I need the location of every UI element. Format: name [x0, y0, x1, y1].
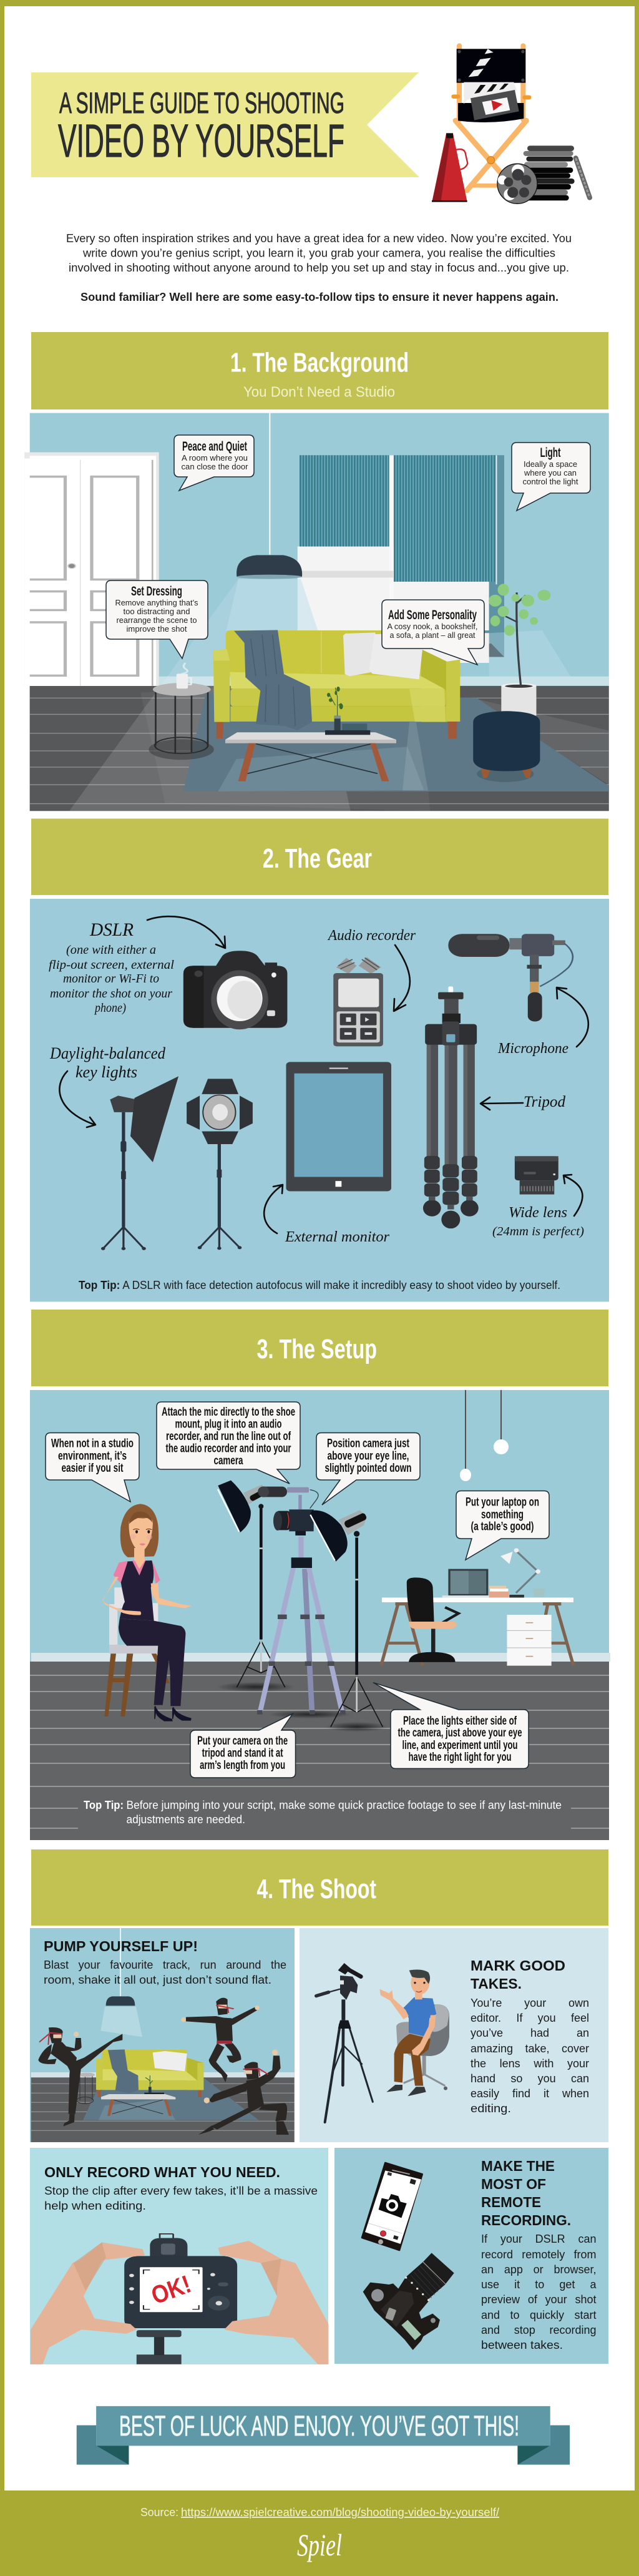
justified text: mark good takes: editor. If you feel	[471, 2012, 589, 2024]
illustration: desk with laptop and chair	[381, 1548, 573, 1666]
panel: pump yourself up: PUMP YOURSELF UP!	[44, 1938, 198, 1954]
gear label: DSLR: phone)	[94, 1001, 126, 1015]
illustration: phone and DSLR	[362, 2163, 454, 2350]
callout: Set Dressing: too distracting and	[124, 607, 190, 616]
justified text: mark good takes	[471, 1997, 589, 2100]
intro text: Sound familiar? Well here are some easy-to-follow tips to ensure it never happens again.	[80, 291, 559, 303]
justified text: mark good takes: amazing take, cover	[471, 2042, 589, 2055]
callout: place the lights: Place the lights either side of	[403, 1715, 517, 1728]
title banner: VIDEO BY YOURSELF	[58, 115, 344, 167]
arrow: audio recorder	[394, 945, 410, 1011]
gear label: DSLR	[49, 919, 174, 1015]
callout: sit	[46, 1433, 139, 1502]
panel: only record what you need: help when editing.	[44, 2200, 146, 2212]
arrow: DSLR	[147, 916, 225, 948]
arrow: microphone	[557, 987, 588, 1047]
arrow: key lights	[59, 1071, 95, 1127]
callout: Set Dressing: Remove anything that’s	[115, 598, 198, 607]
callout: attach the mic: Attach the mic directly to the shoe	[162, 1406, 295, 1419]
gear label: Daylight-balanced key lights	[49, 1044, 166, 1081]
footer: Source:	[140, 2506, 178, 2519]
callout: sit: environment, it’s	[58, 1449, 127, 1463]
intro text: write down you’re genius script, you learn it, you grab your camera, you realise the difficulties	[82, 247, 555, 260]
justified text: pump yourself up: Blast your favourite track, run around the	[44, 1959, 286, 1971]
callout: position camera	[316, 1433, 420, 1505]
panel: make the most of remote recording: REMOTE	[481, 2194, 541, 2210]
panel: living room scene	[24, 413, 609, 811]
callout: Add Some Personality	[382, 600, 484, 665]
gear label: DSLR: DSLR	[89, 919, 134, 940]
illustration: presenter, lights and camera on tripod	[102, 1481, 388, 1732]
heading: 2. The Gear: 2. The Gear	[263, 843, 372, 874]
icon: director chair, clapperboard, megaphone and film reels	[432, 46, 590, 203]
justified text: remote recording: and stop recording	[481, 2324, 597, 2336]
gear label: Wide lens	[492, 1205, 584, 1238]
panel: mark good takes: editing.	[471, 2102, 511, 2115]
gear label: Wide lens: Wide lens	[509, 1205, 567, 1221]
icon: audio recorder	[333, 957, 383, 1046]
panel: only record what you need	[30, 2148, 328, 2364]
gear label: Audio recorder: Audio recorder	[327, 928, 416, 944]
intro text: involved in shooting without anyone around to help you set up and stay in focus and...you give up.	[69, 262, 569, 274]
ribbon banner	[77, 2406, 570, 2465]
justified text: remote recording: an app or browser,	[481, 2263, 597, 2276]
arrow: tripod	[480, 1097, 523, 1110]
justified text: remote recording: and to quickly start	[481, 2309, 597, 2321]
callout: sit: easier if you sit	[61, 1462, 124, 1475]
arrow: external monitor	[264, 1185, 283, 1233]
right light	[310, 1510, 383, 1727]
callout: attach the mic: recorder, and run the line out of	[166, 1430, 291, 1443]
icon: external monitor tablet	[286, 1062, 391, 1191]
ninja jumping	[186, 1998, 258, 2082]
footer	[0, 2490, 639, 2576]
panel: make the most of remote recording	[334, 2148, 608, 2364]
callout: Peace and Quiet: A room where you	[182, 453, 248, 463]
callout: Light: where you can	[524, 468, 577, 477]
icon: DSLR camera	[183, 951, 287, 1029]
justified text: remote recording	[481, 2233, 597, 2336]
icon: tripod	[423, 986, 479, 1228]
justified text: mark good takes: you’ve had an	[471, 2027, 589, 2039]
justified text: mark good takes: the lens with your	[471, 2057, 589, 2070]
illustration: man on chair with tripod camera	[316, 1963, 449, 2122]
icon: softbox light	[101, 1076, 178, 1250]
callout: Peace and Quiet	[174, 435, 254, 491]
callout: Light	[512, 443, 590, 511]
callout: Add Some Personality: A cosy nook, a bookshelf,	[387, 622, 478, 631]
justified text: remote recording: If your DSLR can	[481, 2233, 597, 2245]
title banner	[31, 72, 419, 177]
gear label: DSLR: (one with either a	[66, 943, 156, 957]
callout: tripod distance: Put your camera on the	[197, 1735, 288, 1748]
callout: place the lights: have the right light for you	[408, 1751, 512, 1764]
callout: Light: Light	[540, 446, 561, 460]
heading: 4. The Shoot: 4. The Shoot	[257, 1874, 376, 1904]
ninja lunging	[198, 2055, 289, 2135]
callout: Add Some Personality: Add Some Personality	[388, 608, 477, 622]
gear label: External monitor: External monitor	[285, 1229, 390, 1245]
panel: make the most of remote recording: MAKE THE	[481, 2158, 555, 2174]
footer: Spiel	[297, 2527, 342, 2562]
panel: pump yourself up: room, shake it all out, just don’t sound flat.	[44, 1974, 271, 1986]
icon: wide lens	[515, 1156, 559, 1195]
intro text: Every so often inspiration strikes and you have a great idea for a new video. Now you’re excited. You	[66, 232, 572, 245]
callout: laptop: Put your laptop on	[466, 1496, 539, 1509]
callout: laptop	[456, 1491, 549, 1560]
callout: Peace and Quiet: can close the door	[181, 462, 248, 471]
callout: sit: When not in a studio	[51, 1437, 134, 1451]
panel: only record what you need: Stop the clip after every few takes, it’ll be a massive	[44, 2185, 318, 2197]
title banner: A SIMPLE GUIDE TO SHOOTING	[59, 86, 344, 119]
panel: make the most of remote recording: MOST OF	[481, 2176, 546, 2192]
gear label: Wide lens: (24mm is perfect)	[492, 1225, 584, 1238]
illustration: ninjas in living room	[31, 1996, 295, 2142]
gear label: Daylight-balanced key lights: key lights	[76, 1063, 137, 1081]
callout: attach the mic: camera	[213, 1454, 243, 1467]
justified text: remote recording: preview of your shot	[481, 2293, 597, 2306]
panel: mark good takes: MARK GOOD	[471, 1957, 565, 1974]
heading: 1. The Background	[31, 332, 608, 409]
panel: the setup scene	[30, 1390, 610, 1840]
panel: make the most of remote recording: RECORDING.	[481, 2212, 571, 2228]
top tip: gear: Top Tip: A DSLR with face detection autofocus will make it incredibly easy to shoot video by yourself.	[79, 1279, 560, 1291]
callout: Peace and Quiet: Peace and Quiet	[182, 439, 247, 454]
heading: 2. The Gear	[31, 819, 608, 895]
gear label: DSLR: flip-out screen, external	[49, 958, 174, 972]
callout: place the lights: the camera, just above your eye	[398, 1726, 522, 1740]
callout: tripod distance: arm’s length from you	[200, 1759, 285, 1772]
panel: pump yourself up	[30, 1928, 295, 2142]
callout: Set Dressing: improve the shot	[126, 624, 187, 634]
sofa, throw and coffee table	[213, 630, 460, 791]
icon: microphone	[448, 934, 573, 1022]
panel: mark good takes	[300, 1928, 608, 2142]
illustration: hands holding camera	[31, 2234, 328, 2364]
callout: tripod distance	[190, 1714, 296, 1778]
callout: attach the mic: the audio recorder and into your	[166, 1442, 291, 1456]
callout: laptop: something	[481, 1509, 524, 1522]
heading: 3. The Setup: 3. The Setup	[257, 1334, 377, 1364]
woman on chair	[102, 1504, 192, 1721]
justified text: remote recording: use it to get a	[481, 2278, 597, 2291]
callout: position camera: Position camera just	[327, 1437, 409, 1451]
callout: Set Dressing	[106, 580, 208, 659]
callout: tripod distance: tripod and stand it at	[202, 1746, 283, 1760]
gear label: DSLR: monitor or Wi-Fi to	[63, 972, 159, 986]
OK on camera screen: OK!	[148, 2270, 195, 2310]
top tip: setup: adjustments are needed.	[126, 1813, 245, 1826]
panel: mark good takes: TAKES.	[471, 1976, 522, 1992]
gear label: Microphone: Microphone	[497, 1041, 568, 1057]
callout: Light: control the light	[523, 477, 578, 486]
panel: only record what you need: ONLY RECORD WHAT YOU NEED.	[44, 2164, 280, 2180]
side table, plant and ottoman	[149, 584, 609, 782]
callout: attach the mic: mount, plug it into an audio	[175, 1418, 282, 1431]
camera tripod	[257, 1486, 346, 1715]
footer: https://www.spielcreative.com/blog/shooting-video-by-yourself/	[181, 2506, 499, 2519]
callout: position camera: above your eye line,	[327, 1449, 409, 1463]
justified text: mark good takes: hand so you can	[471, 2072, 589, 2085]
callout: place the lights: line, and experiment until you	[402, 1739, 518, 1752]
left light	[218, 1481, 285, 1687]
gear label: DSLR: monitor the shot on your	[50, 987, 172, 1001]
gear label: Tripod: Tripod	[524, 1094, 565, 1110]
top tip: setup	[84, 1799, 562, 1826]
callout: laptop: (a table’s good)	[471, 1521, 534, 1534]
heading: 3. The Setup	[31, 1310, 608, 1386]
heading: 1. The Background: You Don’t Need a Studio	[243, 383, 395, 399]
top tip: setup: Top Tip:	[84, 1799, 124, 1811]
top tip: setup: Before jumping into your script, make some quick practice footage to see if any last-minute	[126, 1799, 562, 1811]
callout: position camera: slightly pointed down	[324, 1462, 412, 1475]
heading: 1. The Background: 1. The Background	[230, 347, 409, 378]
callout: Light: Ideally a space	[524, 459, 577, 469]
ninja kicking	[38, 2027, 122, 2127]
justified text: remote recording: record remotely from	[481, 2248, 597, 2261]
gear label: Daylight-balanced key lights: Daylight-balanced	[49, 1044, 166, 1062]
justified text: mark good takes: You’re your own	[471, 1997, 589, 2009]
icon: barn door light	[187, 1079, 253, 1250]
intro text	[66, 232, 572, 303]
heading: 4. The Shoot	[31, 1849, 608, 1926]
callout: Add Some Personality: a sofa, a plant – all great	[389, 630, 476, 640]
callout: Set Dressing: rearrange the scene to	[116, 615, 197, 625]
justified text: mark good takes: easily find it when	[471, 2087, 589, 2100]
callout: Set Dressing: Set Dressing	[131, 584, 182, 599]
callout: attach the mic	[157, 1402, 300, 1484]
panel: the gear	[30, 899, 609, 1302]
panel: make the most of remote recording: between takes.	[481, 2339, 563, 2351]
arrow: wide lens	[563, 1175, 582, 1216]
callout: place the lights	[373, 1683, 529, 1768]
pendant lights	[460, 1390, 509, 1481]
